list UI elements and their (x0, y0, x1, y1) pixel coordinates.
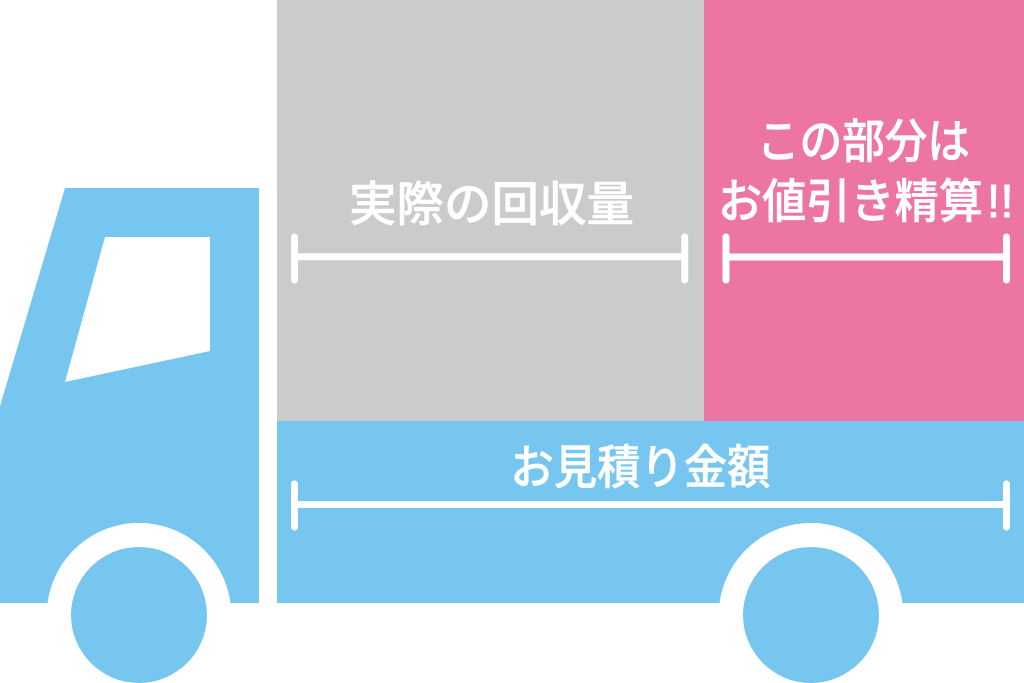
bracket: actual collection width (294, 237, 685, 280)
heading: discount portion: ! (1001, 175, 1013, 227)
icon: rear wheel (743, 547, 879, 683)
heading: discount portion: ! (987, 175, 1000, 227)
panel: truck bed estimate (277, 421, 1024, 603)
bracket: estimate width (294, 484, 1006, 527)
heading: discount portion: お値引き精算 (718, 175, 983, 228)
heading: discount portion: この部分は (757, 115, 970, 168)
heading: actual collection amount: 実際の回収量 (349, 179, 634, 232)
panel: actual collection amount (277, 0, 704, 421)
icon: truck cab (0, 188, 259, 603)
bracket: discount width (726, 237, 1006, 280)
panel: discount portion (704, 0, 1024, 421)
icon: cab window (65, 237, 210, 382)
icon: front wheel (71, 547, 207, 683)
heading: estimate amount: お見積り金額 (510, 441, 770, 494)
heading: discount portion (718, 115, 1013, 228)
